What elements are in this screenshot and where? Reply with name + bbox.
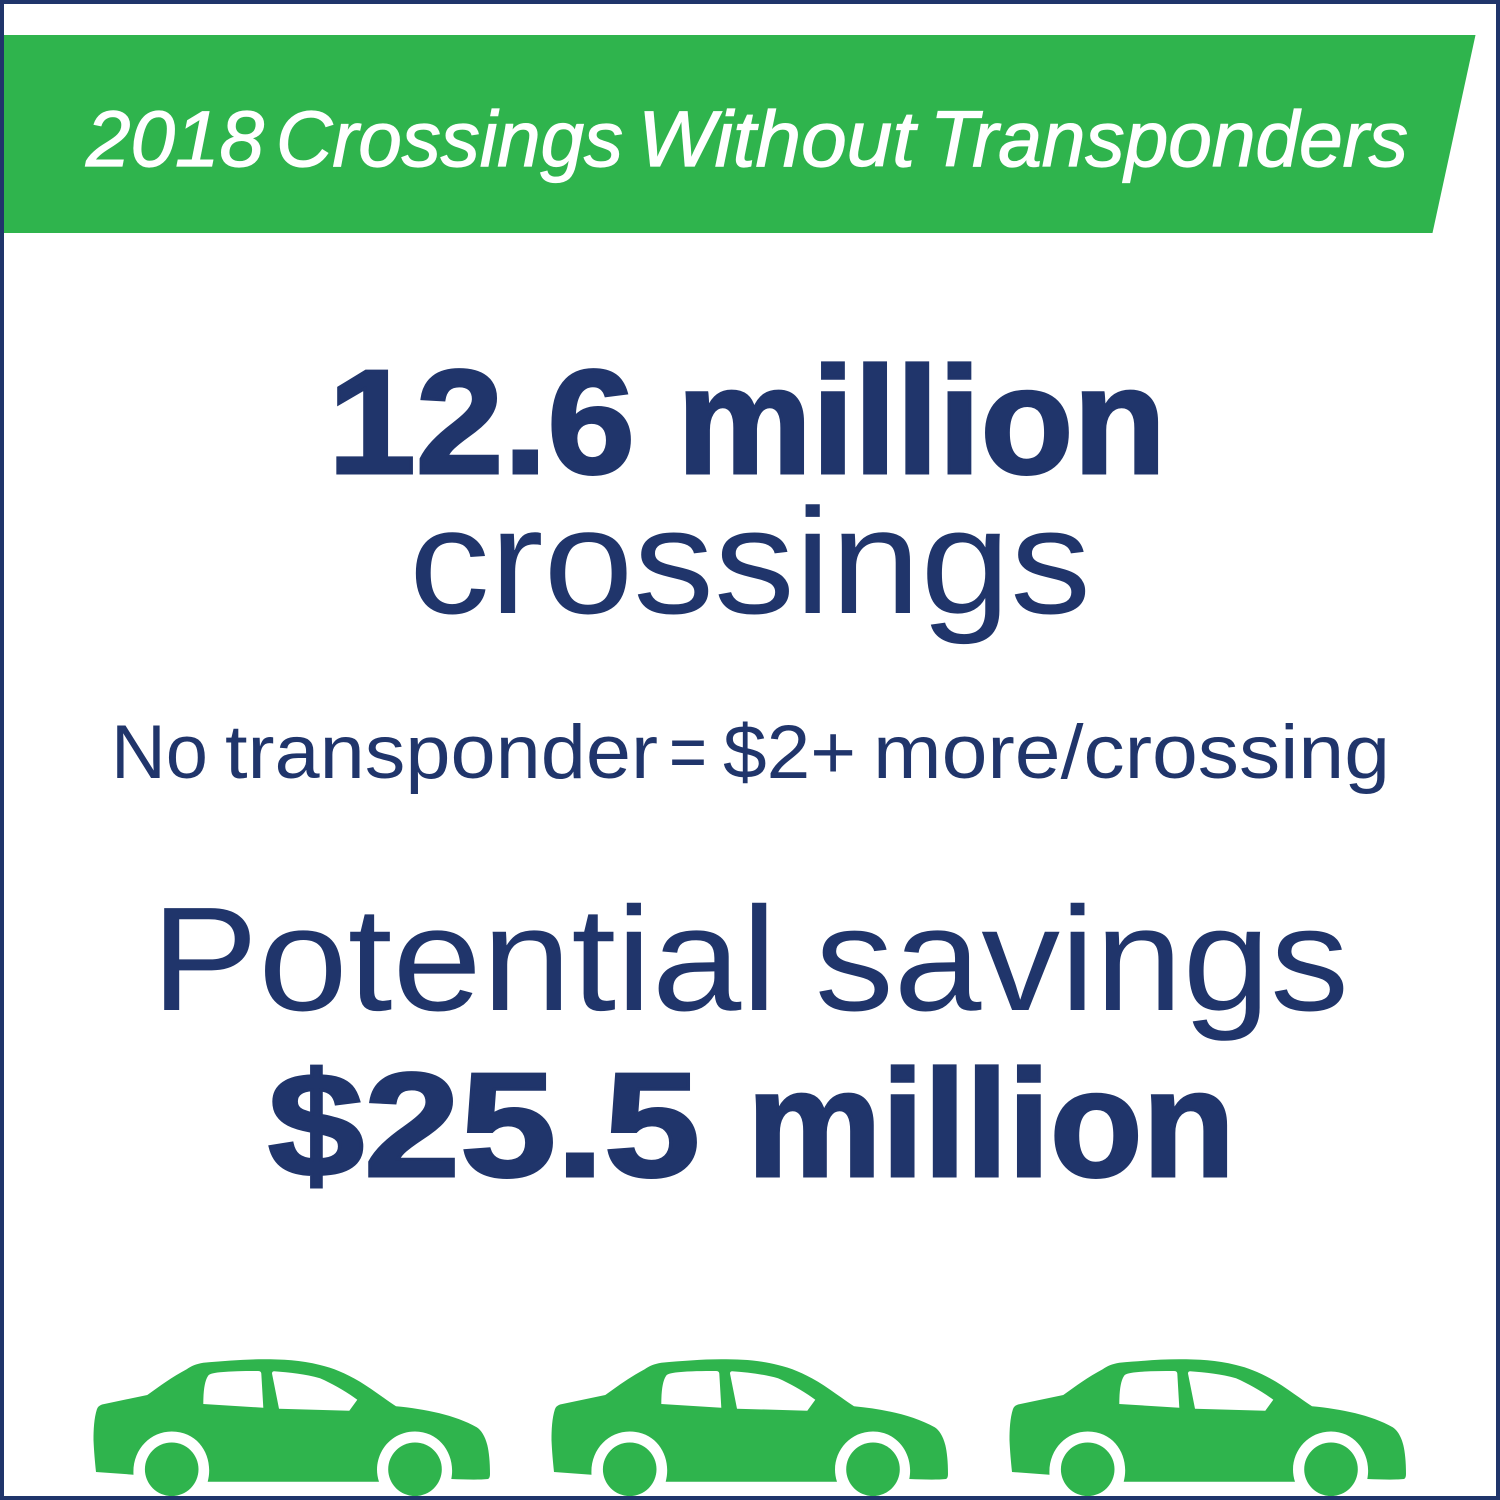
text: cost per crossing: No xyxy=(111,710,208,795)
stat: 12.6 million crossings xyxy=(328,336,1166,645)
title: 2018 xyxy=(85,94,264,183)
stat value: $25.5 million: $25.5 xyxy=(268,1043,700,1208)
text: cost per crossing xyxy=(111,710,1390,795)
title: Crossings xyxy=(276,94,623,183)
icon row: cars xyxy=(94,1359,1406,1496)
banner xyxy=(4,35,1476,233)
icon: car 2 xyxy=(552,1359,948,1496)
stat value: 12.6 million: 12.6 xyxy=(328,340,635,505)
text: cost per crossing: $2+ xyxy=(723,710,856,795)
text: cost per crossing: = xyxy=(669,710,707,795)
text: cost per crossing: transponder xyxy=(225,710,658,795)
title xyxy=(85,94,1408,183)
stat value: $25.5 million xyxy=(268,1039,1235,1209)
text: cost per crossing: more/crossing xyxy=(873,710,1390,795)
stat label: Potential savings: savings xyxy=(815,877,1349,1042)
title: Without xyxy=(638,94,918,183)
stat label: Potential savings: Potential xyxy=(151,877,777,1042)
title: Transponders xyxy=(930,94,1408,183)
icon: car 1 xyxy=(94,1359,490,1496)
stat label: Potential savings xyxy=(151,877,1349,1042)
stat label: crossings: crossings xyxy=(409,477,1091,645)
stat value: 12.6 million: million xyxy=(677,336,1166,506)
stat value: 12.6 million xyxy=(328,336,1166,506)
icon: car 3 xyxy=(1010,1359,1406,1496)
stat: potential savings xyxy=(151,877,1349,1209)
stat value: $25.5 million: million xyxy=(747,1039,1235,1209)
